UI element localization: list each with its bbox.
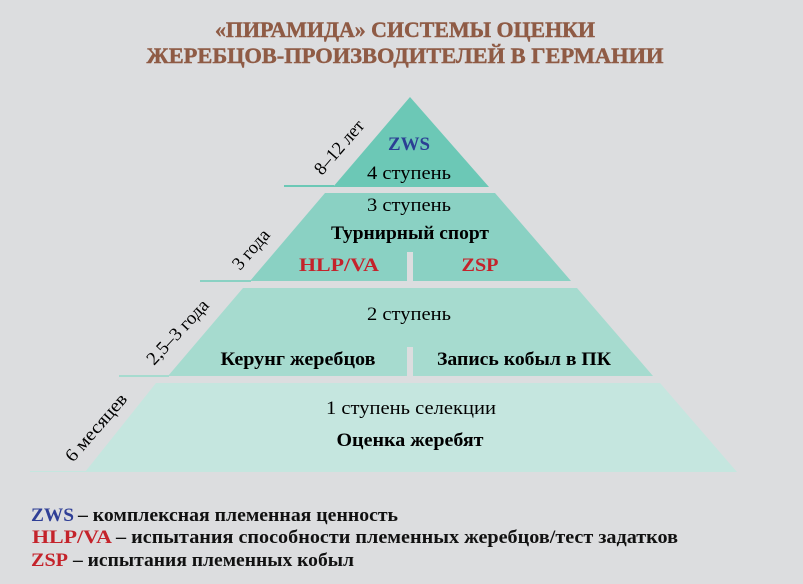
panel: tier 3 [200,193,571,282]
age label: 8-12 лет: 8–12 лет [311,116,369,179]
legend: ZSP: – испытания племенных кобыл [72,550,354,571]
mare registration: Запись кобыл в ПК [437,350,612,370]
title: «ПИРАМИДА» СИСТЕМЫ ОЦЕНКИ [215,17,595,42]
tier 3 label: 3 ступень [367,196,451,216]
panel: tier 4 [284,97,489,187]
age label: 6 месяцев: 6 месяцев [62,390,132,466]
Kerung: Керунг жеребцов [220,350,376,370]
age label: 3 года: 3 года [229,226,275,274]
title: ЖЕРЕБЦОВ-ПРОИЗВОДИТЕЛЕЙ В ГЕРМАНИИ [146,43,664,68]
tier 2 label: 2 ступень [367,305,451,325]
legend: ZSP: ZSP [31,550,68,571]
tier 4 label: 4 ступень [367,164,451,184]
tier 1 label: 1 ступень селекции [326,399,496,419]
legend: ZWS: ZWS [31,505,74,526]
tier 3 heading: Турнирный спорт [331,224,489,244]
legend: ZWS: – комплексная племенная ценность [77,505,398,526]
legend: HLP/VA: HLP/VA [32,527,112,548]
age label: 2,5-3 года: 2,5–3 года [143,296,214,369]
HLP/VA: HLP/VA [299,256,380,276]
ZSP: ZSP [462,256,498,276]
legend: HLP/VA: – испытания способности племенных жеребцов/тест задатков [115,527,678,548]
tier 4 abbreviation: ZWS [388,135,430,155]
tier 1 heading: Оценка жеребят [336,431,484,451]
legend [31,505,678,571]
panel: tier 1 [30,383,737,472]
panel: tier 2 [119,288,653,377]
title [146,17,664,68]
